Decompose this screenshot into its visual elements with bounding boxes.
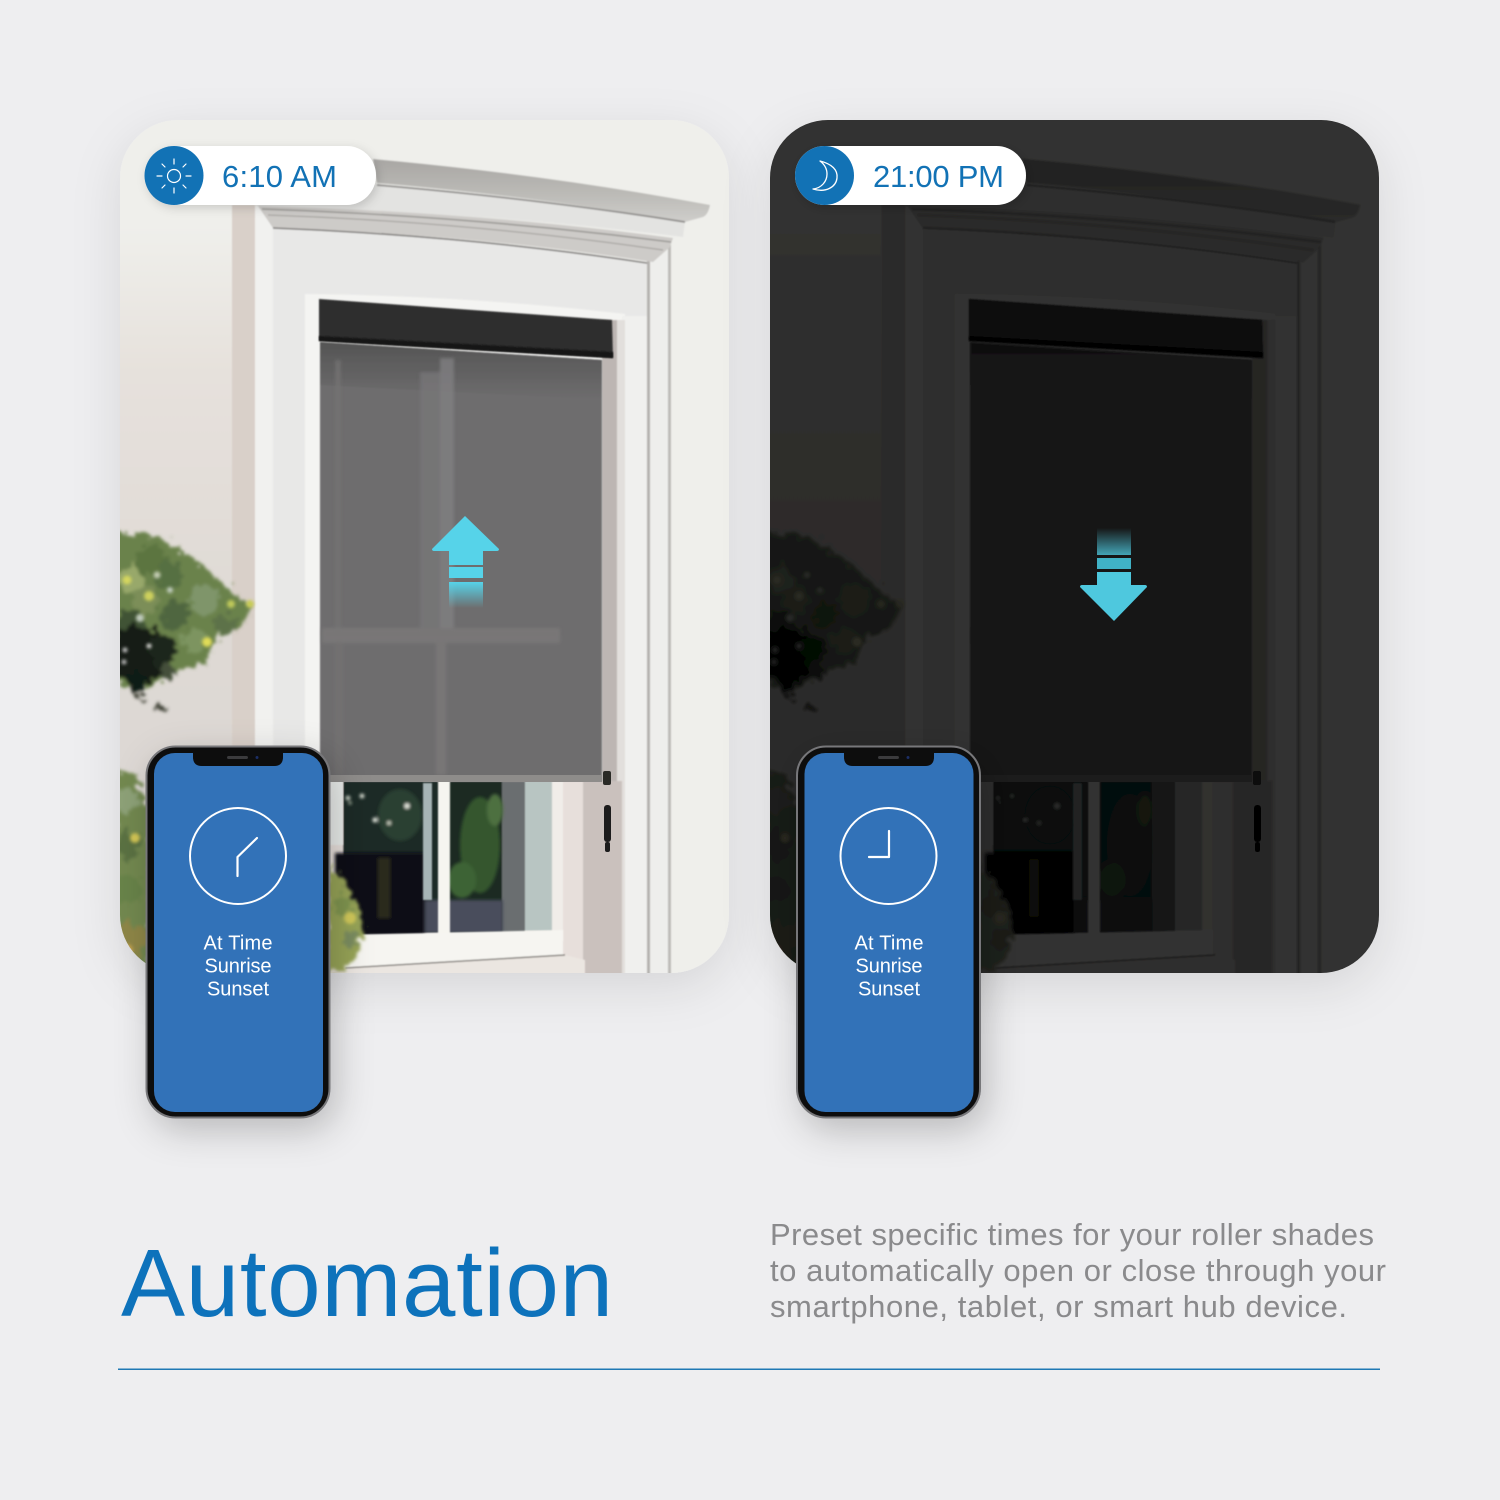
- phone options text: At Time: [204, 932, 272, 954]
- time pill: morning: [144, 146, 376, 205]
- description text: smartphone, tablet, or smart hub device.: [770, 1289, 1347, 1324]
- description text: [770, 1217, 1386, 1324]
- title: Automation: [121, 1230, 613, 1337]
- phone options text: Sunset: [858, 978, 920, 1000]
- phone options text: [204, 932, 272, 1000]
- icon: moon: [795, 146, 854, 205]
- phone options text: Sunrise: [204, 956, 272, 978]
- phone: evening schedule: [797, 746, 980, 1118]
- phone options text: [854, 932, 924, 1000]
- icon: sun: [144, 146, 204, 205]
- time pill: evening: [795, 146, 1026, 205]
- icon: clock: [840, 808, 936, 904]
- panel: morning window photo: [112, 158, 737, 995]
- time label: 21:00 PM: 21:00 PM: [873, 159, 1004, 194]
- arrow: shade lowering: [1080, 528, 1147, 621]
- phone options text: At Time: [854, 932, 924, 954]
- time label: 6:10 AM: 6:10 AM: [222, 159, 337, 194]
- description text: to automatically open or close through your: [770, 1253, 1386, 1288]
- arrow: shade rising: [432, 516, 499, 608]
- icon: clock: [190, 808, 286, 904]
- phone: morning schedule: [146, 746, 330, 1118]
- description text: Preset specific times for your roller shades: [770, 1217, 1374, 1252]
- panel: evening window photo: [750, 100, 1400, 1000]
- phone options text: Sunrise: [856, 956, 922, 978]
- phone options text: Sunset: [207, 978, 269, 1000]
